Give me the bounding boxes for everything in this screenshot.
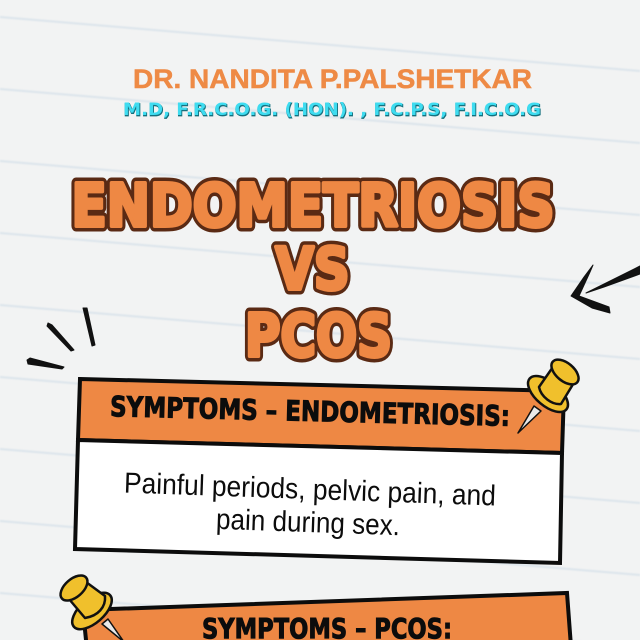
title: VS	[276, 235, 350, 303]
title: ENDOMETRIOSIS	[72, 171, 554, 240]
panel: symptoms endometriosis	[75, 379, 564, 563]
title	[72, 171, 554, 370]
icon: push pin bottom	[56, 571, 124, 640]
panel header background	[78, 379, 564, 453]
title: PCOS	[245, 301, 392, 370]
panel heading: SYMPTOMS – ENDOMETRIOSIS:	[110, 390, 510, 433]
body line 1: Painful periods, pelvic pain, and	[124, 468, 496, 512]
author name: DR. NANDITA P.PALSHETKAR	[133, 64, 532, 94]
body text	[124, 468, 496, 542]
icon: hand-drawn arrow	[571, 265, 640, 313]
icon: push pin top	[518, 355, 583, 433]
panel body background	[75, 440, 562, 563]
panel header background	[83, 593, 572, 640]
title line: vs: VS	[276, 235, 350, 303]
title line: PCOS: PCOS	[245, 301, 392, 370]
panel: symptoms PCOS	[83, 593, 572, 640]
title line: Endometriosis: ENDOMETRIOSIS	[72, 171, 554, 240]
author credentials: M.D, F.R.C.O.G. (HON). , F.C.P.S, F.I.C.O.G	[124, 101, 542, 121]
author credentials: M.D, F.R.C.O.G. (HON). , F.C.P.S, F.I.C.O.G	[123, 100, 541, 120]
icon: emphasis marks	[27, 308, 95, 369]
body line 2: pain during sex.	[215, 504, 401, 542]
